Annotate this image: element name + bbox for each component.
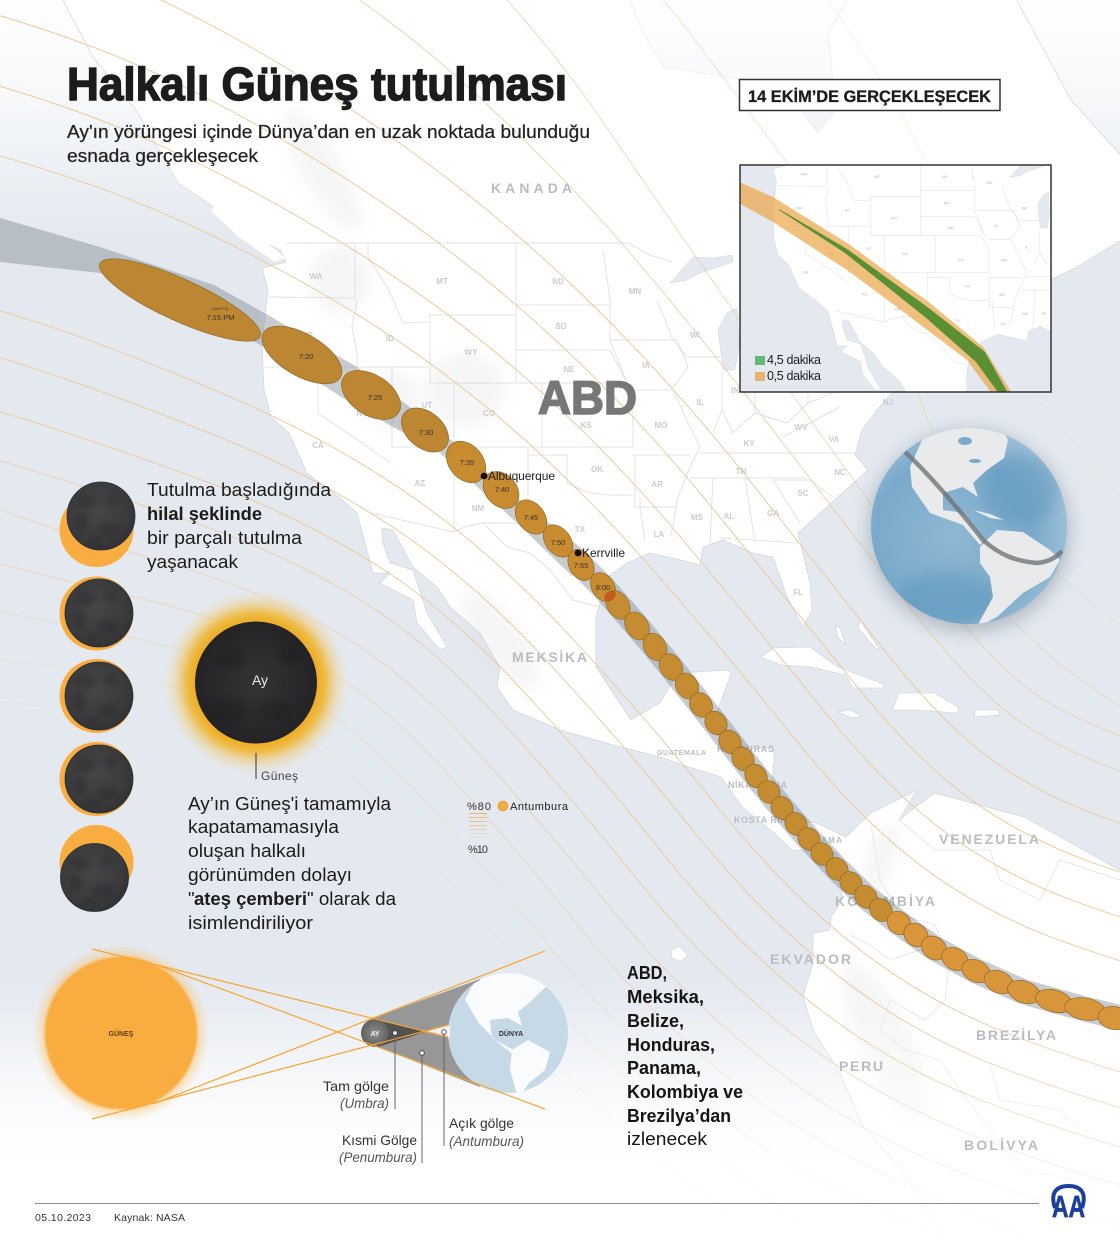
text: viewing countries: Panama, [627, 1058, 701, 1078]
panel: duration inset map: NV [828, 251, 834, 256]
state labels: AR [651, 480, 663, 489]
text: ring of fire explanation: " olarak da [307, 888, 397, 909]
umbra leader: (Umbra) [340, 1095, 389, 1111]
diagram: sun earth moon geometry [32, 944, 568, 1165]
text: crescent explanation: hilal şeklinde [147, 503, 262, 524]
panel: duration inset map: AR [999, 292, 1005, 297]
label: Güneş: Güneş [261, 769, 298, 783]
panel: duration inset map: IA [994, 223, 998, 228]
state labels: AZ [415, 479, 425, 488]
state labels: IL [696, 398, 704, 407]
state labels: MT [436, 277, 448, 286]
ellipse time labels: 8:00 [596, 583, 610, 592]
sun: GÜNEŞ [109, 1029, 134, 1038]
state labels: MO [655, 421, 667, 430]
state labels [301, 272, 893, 597]
footer [35, 1204, 1039, 1224]
panel: duration inset map: MO [1001, 258, 1008, 263]
text: viewing countries: Brezilya’dan [627, 1106, 731, 1126]
moon: AY [370, 1031, 380, 1038]
legend: partial eclipse: %10 [468, 844, 488, 856]
umbra leader: Tam gölge [323, 1078, 389, 1094]
ellipse time labels: 7:25 [368, 393, 382, 402]
state labels: ID [386, 334, 394, 343]
antumbra leader: (Antumbura) [449, 1133, 524, 1149]
antumbra leader [442, 1030, 524, 1149]
moon [361, 1019, 389, 1047]
panel: duration inset map: NM [895, 306, 902, 311]
panel: duration inset map: TX [955, 318, 960, 323]
penumbra leader: Kısmi Gölge [342, 1132, 417, 1148]
antumbra leader: Açık gölge [449, 1115, 514, 1131]
panel: duration inset map: WI [1022, 206, 1027, 211]
state labels: KS [580, 421, 592, 430]
antumbra [425, 1025, 450, 1038]
panel: duration inset map: WY [891, 215, 898, 220]
panel: duration inset map: CA [803, 269, 808, 274]
terrain shading [270, 99, 944, 1128]
state labels: FL [793, 588, 803, 597]
earth [448, 968, 568, 1098]
panel: duration inset map: SD [944, 200, 949, 205]
penumbra leader [339, 1051, 424, 1165]
footer: 05.10.2023 [35, 1212, 91, 1224]
state labels: KY [743, 439, 755, 448]
phase 4 [60, 742, 134, 816]
state labels: GA [767, 509, 779, 518]
text: ring of fire explanation: " [188, 888, 195, 909]
state labels: NC [834, 468, 846, 477]
text: ring of fire explanation: isimlendiriliyor [188, 912, 313, 933]
state labels: WA [310, 272, 323, 281]
state labels: IA [642, 361, 650, 370]
globe eclipse path [905, 452, 1062, 563]
inset legend [755, 353, 821, 383]
penumbra shadow [373, 979, 490, 1087]
panel: duration inset map: CO [902, 251, 908, 256]
umbra leader [323, 1031, 397, 1111]
state labels: NJ [883, 398, 893, 407]
state labels: OK [591, 465, 603, 474]
earth: DÜNYA [499, 1029, 523, 1038]
phase 1: crescent start [60, 482, 135, 567]
country labels: KANADA [491, 180, 572, 196]
panel: duration inset map: NE [948, 225, 954, 230]
globe [869, 424, 1069, 631]
country labels: PANAMA [801, 836, 842, 845]
ellipse time labels: 7:30 [419, 428, 433, 437]
sun [32, 944, 210, 1122]
text: ring of fire explanation: oluşan halkalı [188, 840, 306, 861]
text: ring of fire explanation: görünümden dolayı [188, 864, 352, 885]
text: viewing countries: Belize, [627, 1011, 684, 1031]
legend: partial eclipse: Antumbura [510, 801, 569, 813]
text: ring of fire explanation: ateş çemberi [194, 888, 307, 909]
country labels: GUATEMALA [657, 750, 706, 757]
state labels: UT [422, 401, 432, 410]
logo: AA: AA [1052, 1189, 1085, 1224]
state labels: TN [736, 467, 747, 476]
text: ring of fire explanation: kapatamamasıyla [188, 816, 340, 837]
state labels: TX [575, 525, 586, 534]
state labels: NE [563, 365, 575, 374]
annular eclipse illustration [164, 590, 348, 774]
city: Albuquerque: Albuquerque [488, 469, 555, 483]
ellipse time labels: 7:15 PM [207, 313, 234, 322]
tangent rays [92, 949, 545, 1119]
state labels: CA [312, 441, 324, 450]
date badge: 14 EKİM’DE GERÇEKLEŞECEK [748, 87, 992, 106]
panel: duration inset map: ID [845, 207, 849, 212]
text: crescent explanation [147, 479, 332, 572]
state labels: VA [829, 435, 839, 444]
state labels: WI [690, 331, 700, 340]
state labels: NV [356, 409, 368, 418]
text: crescent explanation: yaşanacak [147, 551, 239, 572]
panel: duration inset map [739, 164, 1052, 393]
footer: Kaynak: NASA [114, 1212, 185, 1224]
panel: duration inset map: ND [942, 174, 948, 179]
penumbra leader: (Penumbura) [339, 1149, 417, 1165]
text: crescent explanation: Tutulma başladığında [147, 479, 332, 500]
country labels [491, 180, 1056, 1153]
eclipse path ellipses [91, 244, 1120, 1032]
legend: partial eclipse: %80 [467, 801, 491, 813]
country labels: KOSTA RİKA [734, 815, 794, 825]
phase 3 [60, 659, 134, 733]
label: Güneş [256, 753, 298, 783]
text: ring of fire explanation: Ay’ın Güneş'i tamamıyla [188, 793, 392, 814]
panel: duration inset map: MN [986, 180, 993, 185]
city: Kerrville: Kerrville [582, 546, 625, 560]
panel: duration inset map: AZ [862, 291, 868, 296]
panel: duration inset map: OK [964, 283, 970, 288]
ellipse time labels: 7:50 [551, 538, 565, 547]
ellipse time labels: 7:55 [574, 561, 588, 570]
eclipse path band [0, 218, 1120, 1025]
ellipse time labels: 7:35 [460, 458, 474, 467]
country labels: NİKARAGUA [728, 780, 788, 790]
state labels: WV [795, 423, 808, 432]
state labels: CO [483, 409, 495, 418]
country labels: KOLOMBİYA [835, 893, 935, 909]
state labels: ND [552, 277, 564, 286]
text: viewing countries: izlenecek [627, 1129, 708, 1149]
country labels: EKVADOR [770, 951, 851, 967]
panel: duration inset map: MT [874, 174, 881, 179]
state labels: LA [654, 530, 665, 539]
country label: ABD: ABD [538, 371, 637, 424]
date badge [740, 80, 1000, 110]
white fades over map [0, 1000, 1120, 1240]
inset legend: 0,5 dakika [767, 369, 821, 383]
ellipse time labels: 7:40 [495, 485, 509, 494]
country labels: HONDURAS [717, 744, 774, 754]
ellipse time labels: 7:20 [299, 352, 313, 361]
panel: duration inset map: KS [958, 258, 964, 263]
panel: duration inset map: WA [801, 171, 808, 176]
panel: duration inset map: AL [1041, 311, 1047, 316]
state labels: NM [472, 504, 485, 513]
panel: duration inset map: MS [1022, 311, 1029, 316]
text: viewing countries: Kolombiya ve [627, 1082, 743, 1102]
subtitle: Ay'ın yörüngesi içinde Dünya’dan en uzak noktada bulunduğu [67, 121, 590, 142]
subtitle [67, 121, 590, 166]
umbra [378, 1019, 425, 1047]
panel: duration inset map: OR [796, 206, 802, 211]
country labels: VENEZUELA [939, 831, 1039, 847]
state labels: IN [731, 386, 739, 395]
text: viewing countries [627, 963, 743, 1149]
text: viewing countries: ABD, [627, 963, 667, 983]
country labels: BREZİLYA [976, 1027, 1056, 1043]
country labels: PERU [839, 1058, 883, 1074]
country labels: MEKSİKA [512, 649, 587, 665]
legend: partial eclipse [467, 801, 569, 856]
logo: AA [1052, 1186, 1085, 1224]
state labels: SC [797, 489, 809, 498]
inset band: 4,5 minutes [779, 209, 1009, 395]
phase 5 [60, 825, 134, 912]
panel: duration inset map: IL [1025, 244, 1029, 249]
state labels: MS [691, 513, 704, 522]
state labels: WY [465, 348, 478, 357]
state labels: SD [555, 322, 567, 331]
annular eclipse illustration: Ay [252, 672, 268, 688]
subtitle: esnada gerçekleşecek [67, 145, 259, 166]
title: Halkalı Güneş tutulması [67, 58, 567, 110]
ellipse time labels: (GMT+3) [212, 306, 229, 311]
panel: duration inset map: LA [1001, 321, 1006, 326]
text: viewing countries: Meksika, [627, 987, 704, 1007]
state labels: MN [629, 287, 641, 296]
ellipse time labels: 7:45 [524, 513, 538, 522]
ellipse time labels [207, 306, 610, 592]
inset band: 0,5 minutes [735, 180, 1015, 398]
phase 2 [60, 576, 134, 650]
state labels: OR [301, 331, 313, 340]
text: ring of fire explanation [188, 793, 397, 933]
text: viewing countries: Honduras, [627, 1035, 715, 1055]
South America borders [850, 820, 1120, 1180]
country labels: BOLİVYA [964, 1137, 1038, 1153]
state labels: AL [724, 512, 734, 521]
panel: duration inset map: UT [866, 246, 872, 251]
inset legend: 4,5 dakika [767, 353, 821, 367]
text: crescent explanation: bir parçalı tutulma [147, 527, 303, 548]
